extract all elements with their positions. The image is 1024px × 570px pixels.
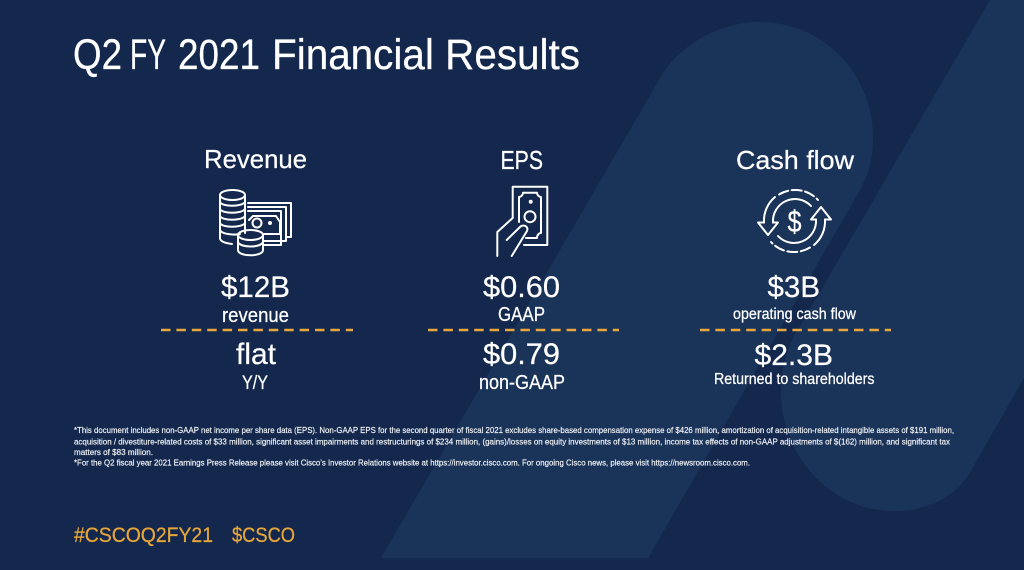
hashtags: #CSCOQ2FY21 <box>74 524 213 547</box>
title: 2021 <box>178 31 260 79</box>
heading: EPS: EPS <box>500 145 543 175</box>
title <box>73 31 580 79</box>
footnotes: matters of $83 million. <box>74 447 153 457</box>
title: Q2 <box>73 31 122 79</box>
panel: revenue <box>161 144 353 394</box>
hashtags: $CSCO <box>232 524 295 547</box>
footnotes: *For the Q2 fiscal year 2021 Earnings Press Release please visit Cisco’s Investor Relations website at https://investor.cisco.com. For ongoing Cisco news, please visit https://newsroom.cisco.com. <box>74 458 750 468</box>
label: revenue: revenue <box>222 305 289 327</box>
value: $0.79: $0.79 <box>483 338 560 371</box>
footnotes: acquisition / divestiture-related costs of $33 million, significant asset impairments and restructurings of $234 million, (gains)/losses on equity investments of $13 million, income tax effects of non-GAAP adjustments of $(162) million, and significant tax <box>74 436 951 446</box>
label: Y/Y: Y/Y <box>242 373 268 394</box>
label: operating cash flow: operating cash flow <box>733 306 857 323</box>
value: $0.60: $0.60 <box>483 271 560 304</box>
footnotes: *This document includes non-GAAP net income per share data (EPS). Non-GAAP EPS for the second quarter of fiscal 2021 excludes share-based compensation expense of $426 million, amortization of acquisition-related intangible assets of $191 million, <box>74 425 954 435</box>
icon: circular arrows with dollar sign <box>758 190 831 252</box>
label: GAAP: GAAP <box>498 304 545 326</box>
value: $2.3B: $2.3B <box>754 339 833 372</box>
label: non-GAAP: non-GAAP <box>479 372 565 394</box>
footnotes <box>74 425 954 468</box>
value: $3B: $3B <box>768 271 820 304</box>
hashtags <box>74 524 295 547</box>
heading: cash flow: Cash flow <box>736 145 854 175</box>
panel: EPS <box>428 145 619 394</box>
icon: coins and banknotes <box>220 190 291 255</box>
value: $12B: $12B <box>221 271 290 304</box>
value: flat: flat <box>236 338 277 371</box>
icon: hand holding banknote <box>497 187 547 256</box>
label: returned to shareholders: Returned to shareholders <box>714 371 875 388</box>
title: Financial Results <box>272 31 580 79</box>
title: FY <box>130 31 166 79</box>
heading: revenue: Revenue <box>204 144 307 174</box>
panel: cash flow <box>700 145 891 388</box>
icon: circular arrows with dollar sign: $ <box>788 204 802 239</box>
